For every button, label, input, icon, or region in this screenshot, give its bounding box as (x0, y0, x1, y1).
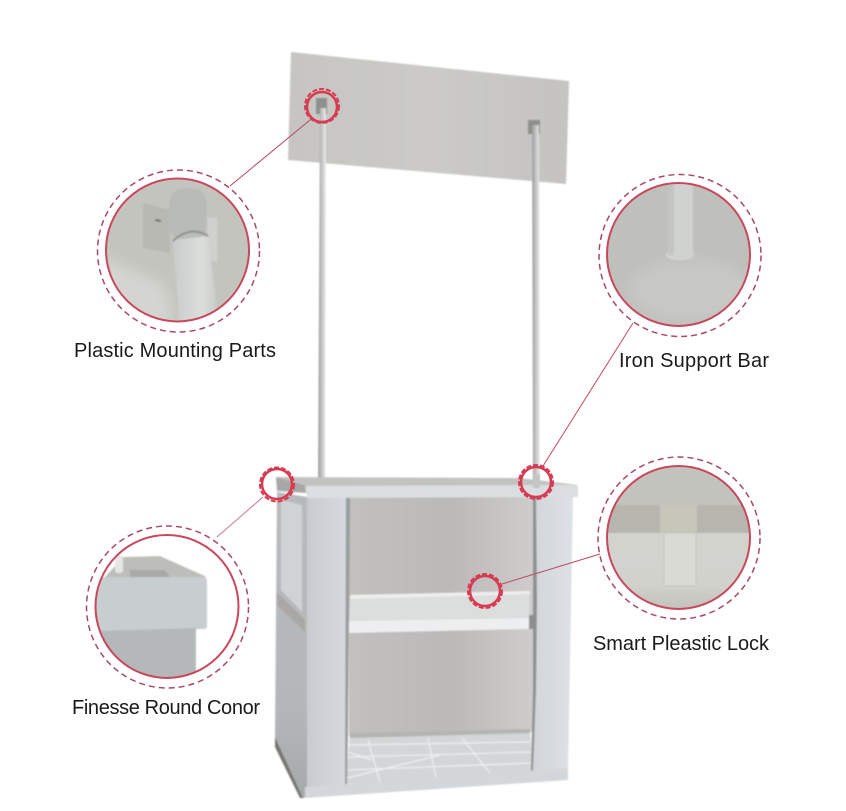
right front pillar (533, 497, 573, 772)
solid ring (607, 466, 750, 609)
solid ring (106, 178, 249, 322)
left front pillar (307, 497, 346, 795)
leader line (502, 554, 600, 584)
back wall (349, 497, 535, 736)
solid ring (96, 535, 238, 678)
left support pole (318, 108, 326, 480)
callout: iron support bar (519, 174, 769, 499)
shelf (349, 592, 530, 621)
counter cabinet (275, 477, 578, 798)
target ring (519, 465, 553, 499)
dashed ring (599, 174, 761, 336)
label: Plastic Mounting Parts (74, 340, 276, 362)
target ring (468, 574, 502, 608)
solid ring (607, 183, 750, 326)
dashed ring (86, 526, 248, 688)
detail photo: mounting part (107, 180, 248, 320)
base rail (305, 768, 568, 798)
side panel (275, 492, 307, 798)
leader line (230, 120, 310, 186)
leader line (543, 323, 633, 466)
dashed ring (598, 457, 760, 619)
label: Finesse Round Conor (72, 697, 260, 719)
banner board (288, 52, 569, 184)
target ring (260, 468, 294, 502)
label: Smart Pleastic Lock (593, 633, 770, 655)
right mounting bracket (528, 120, 540, 134)
right pole lower section (533, 474, 540, 488)
target ring (305, 89, 339, 123)
right support pole (532, 125, 540, 480)
label: Iron Support Bar (619, 350, 769, 372)
counter top (276, 477, 578, 487)
infographic (74, 52, 769, 799)
detail photo: support bar (608, 184, 749, 325)
dashed ring (98, 170, 260, 332)
callout: smart plastic lock (468, 457, 770, 655)
left mounting bracket (316, 98, 327, 114)
detail photo: round corner (96, 554, 208, 677)
floor grid (346, 729, 533, 784)
callout: plastic mounting parts (74, 89, 339, 362)
promotion counter product (275, 52, 578, 798)
leader line (217, 497, 263, 537)
detail photo: plastic lock (608, 467, 749, 608)
callout: finesse round corner (72, 468, 294, 719)
